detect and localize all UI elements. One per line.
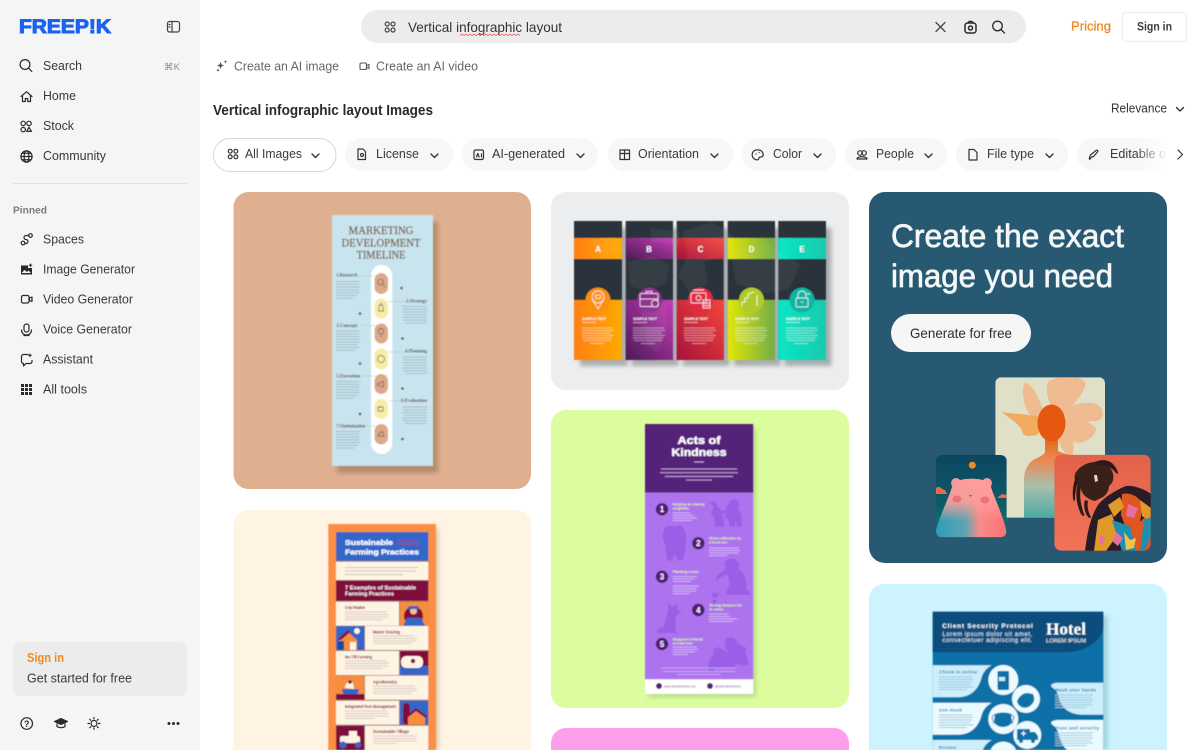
- poster: hotel protocol: [933, 612, 1103, 750]
- columns: [574, 221, 826, 360]
- row images: [336, 602, 428, 750]
- poster shadow: [337, 222, 438, 473]
- row headings: Agroforestry: [373, 680, 398, 684]
- silhouettes: [656, 499, 750, 671]
- nav: search: Search: [43, 58, 82, 73]
- poster title: MARKETING: [348, 225, 414, 237]
- poster: hotel protocol: LOREM IPSUM: [1046, 638, 1086, 644]
- chip: all images: [214, 138, 336, 172]
- poster title: [342, 225, 420, 262]
- chip: people: People: [876, 146, 914, 161]
- number badges: [656, 503, 704, 650]
- step headings: Gives affection to: [709, 536, 742, 540]
- phone icon: [998, 671, 1009, 690]
- row headings: Sustainable Tillage: [373, 729, 410, 734]
- poster title: Acts of: [678, 435, 721, 447]
- nav: video generator: Video Generator: [43, 292, 134, 306]
- number badges: 4: [696, 606, 701, 615]
- nav: home: Home: [43, 88, 76, 103]
- icon: scroll arrow: [1178, 150, 1182, 159]
- image: flower silhouette: [995, 377, 1105, 518]
- nav: spaces: [21, 232, 84, 246]
- spelling underline: [460, 34, 520, 36]
- icon: help: [21, 718, 32, 729]
- step headings: Planting a tree.: [673, 570, 700, 574]
- poster: sustainable farming: Farming Practices: [345, 592, 394, 598]
- row body lines: [345, 612, 417, 744]
- chip: license: License: [376, 146, 419, 161]
- row headings: Crop Rotation: [345, 605, 365, 610]
- column C: C: [698, 245, 704, 254]
- panel headings: Wash your hands: [1055, 688, 1096, 692]
- icon: camera: [965, 22, 976, 33]
- column D: [728, 221, 775, 360]
- poster footer: [656, 683, 741, 689]
- poster: sustainable farming: Farming Practices: [345, 548, 419, 556]
- fade mask over chip row: [1135, 136, 1168, 173]
- panel headings: Check in online: [939, 670, 977, 674]
- promo headline: image you need: [891, 258, 1113, 294]
- poster title: Kindness: [672, 447, 726, 459]
- chip: file type: [956, 138, 1068, 171]
- panel: card acts of kindness: [551, 410, 849, 708]
- panel headings: Use mask: [939, 708, 962, 712]
- panel headings: [939, 670, 1099, 750]
- chip: color: [742, 138, 836, 171]
- column D: SAMPLE TEXT: [735, 317, 760, 321]
- panel: sign in card: Sign in: [27, 650, 64, 665]
- column A: SAMPLE TEXT: [582, 317, 607, 321]
- chip: orientation: Orientation: [638, 146, 699, 161]
- column E: [778, 221, 826, 360]
- row headings: No-Till Farming: [345, 654, 372, 660]
- panel headings: Trust and security: [1055, 726, 1099, 730]
- chip: people: [845, 138, 947, 171]
- icon: more: [168, 722, 180, 725]
- nav: assistant: [22, 352, 93, 366]
- panel: promo create image: [869, 192, 1167, 563]
- step headings: [673, 502, 743, 646]
- step labels: 7.Optimization: [336, 424, 366, 429]
- panel: card hotel protocol: [869, 584, 1167, 750]
- connector lines: [358, 276, 407, 426]
- image: portrait: [1054, 455, 1151, 551]
- nav: spaces: Spaces: [43, 232, 84, 246]
- divider: [13, 183, 187, 184]
- column E: E: [799, 245, 805, 254]
- row headings: [345, 605, 410, 734]
- link: pricing: Pricing: [1071, 18, 1111, 34]
- column A: [574, 221, 622, 360]
- search query text: Vertical infographic layout: [408, 19, 562, 35]
- nav: community: Community: [43, 148, 106, 163]
- poster footer: @actsofkindness: [715, 684, 741, 688]
- icon: search: [993, 21, 1004, 33]
- search bar: [361, 10, 1026, 43]
- ambulance icon: [1017, 729, 1038, 743]
- panel: sign in card: Get started for free: [27, 670, 132, 686]
- link: create an AI video: Create an AI video: [376, 58, 478, 74]
- step body lines: [673, 513, 740, 654]
- sort dropdown: relevance: Relevance: [1111, 100, 1167, 116]
- icon: theme: [88, 718, 100, 729]
- mask icon: [992, 712, 1014, 727]
- column C: [677, 221, 724, 360]
- panel: card five-column banners: [551, 192, 849, 390]
- number badges: 1: [660, 505, 665, 514]
- button: generate for free: [891, 314, 1031, 352]
- panel: card marketing timeline: [234, 192, 531, 489]
- chip: file type: File type: [987, 146, 1034, 161]
- nav: search: [20, 58, 181, 73]
- wavy accent: [398, 540, 418, 545]
- poster intro lines: [660, 469, 738, 480]
- column B: [626, 221, 673, 360]
- subheader: [336, 581, 428, 601]
- image: bear: [936, 455, 1007, 537]
- icon: clear: [936, 22, 945, 32]
- body text lines: [582, 322, 800, 324]
- row headings: Integrated Pest Management: [345, 704, 397, 709]
- panel headings: Rooms: [939, 745, 956, 750]
- step headings: Support a friend: [673, 638, 703, 642]
- filter chips row: [214, 136, 1200, 173]
- chip: AI-generated: AI-generated: [492, 146, 565, 161]
- step headings: a loved one.: [709, 540, 728, 544]
- info panels: [933, 665, 992, 697]
- poster closing text: [662, 668, 736, 674]
- panel: card partially visible pink: [551, 728, 849, 750]
- chip: color: Color: [773, 146, 803, 161]
- panel: sign in card: [13, 642, 187, 696]
- icon: academy: [54, 718, 68, 728]
- column B: B: [646, 245, 652, 254]
- step labels: [336, 274, 428, 429]
- button: sign in: Sign in: [1137, 22, 1172, 34]
- step labels: 3.Concept: [336, 324, 358, 329]
- world map overlay: [590, 222, 800, 352]
- step labels: 1.Research: [336, 274, 358, 279]
- nav: stock: [21, 118, 74, 133]
- poster shadow: [331, 528, 439, 750]
- step headings: Helping an elderly: [673, 502, 706, 506]
- nav: search: ⌘ K: [164, 62, 181, 73]
- timeline icons: [378, 279, 385, 436]
- row text boxes: [336, 602, 428, 750]
- hand washing icon: [1017, 693, 1034, 708]
- chip: orientation: [608, 138, 733, 171]
- button: generate for free: Generate for free: [910, 325, 1012, 341]
- nav: stock: Stock: [43, 118, 74, 133]
- nav: home: [21, 88, 76, 103]
- poster: sustainable farming: 7 Examples of Sustainable: [345, 586, 416, 592]
- poster title: TIMELINE: [356, 250, 406, 262]
- chip: all images: All Images: [245, 146, 302, 161]
- nav: voice generator: Voice Generator: [43, 322, 133, 336]
- step headings: Giving flowers for: [709, 604, 743, 608]
- button: sign in: [1122, 12, 1186, 42]
- panel: left sidebar: [0, 0, 200, 750]
- nav: assistant: Assistant: [43, 352, 93, 366]
- row headings: Manor Grazing: [373, 630, 400, 634]
- poster title: [672, 435, 726, 459]
- chip: AI-generated: [462, 138, 598, 171]
- poster: hotel protocol: Client Security Protocol: [942, 623, 1033, 630]
- poster shadow: [648, 428, 756, 697]
- column B: SAMPLE TEXT: [633, 317, 658, 321]
- poster: acts of kindness: [645, 424, 753, 694]
- intro block: [336, 562, 428, 580]
- nav: all tools: [21, 382, 87, 396]
- poster footer: www.actsofkindness.com: [664, 684, 696, 688]
- chip: editable: [1077, 138, 1187, 171]
- icon: help: ?: [24, 719, 29, 729]
- step headings: neighbor.: [673, 506, 690, 510]
- column A: A: [595, 245, 601, 254]
- column C: SAMPLE TEXT: [684, 317, 709, 321]
- decorative sparkles: [359, 287, 404, 440]
- logo: FREEP!K: [19, 17, 111, 38]
- poster: hotel protocol: consectetuer adipiscing elit.: [942, 637, 1033, 644]
- poster header: [933, 612, 1103, 652]
- timeline pill: [371, 265, 392, 454]
- column D: D: [749, 245, 755, 254]
- step headings: in a bad time: [673, 642, 693, 646]
- nav: image generator: Image Generator: [43, 262, 136, 276]
- nav: all tools: All tools: [43, 382, 87, 396]
- poster: sustainable farming: [328, 524, 436, 750]
- step headings: no reason.: [709, 608, 724, 612]
- poster shadow: [937, 616, 1108, 750]
- step labels: 5.Execution: [336, 374, 361, 379]
- step body text: [336, 282, 427, 448]
- promo headline: Create the exact: [891, 218, 1124, 254]
- number badges: 2: [696, 539, 701, 548]
- icon circles: [988, 665, 1041, 750]
- panel: card sustainable farming: [234, 510, 531, 750]
- timeline stops: [374, 273, 388, 444]
- poster header: [336, 532, 428, 561]
- chip: editable: Editable o: [1110, 146, 1166, 161]
- chip: license: [345, 138, 453, 171]
- promo headline: [891, 218, 1124, 294]
- step labels: 2.Strategy: [406, 299, 428, 304]
- poster title: DEVELOPMENT: [342, 238, 420, 250]
- column shadows: [580, 228, 831, 366]
- column E: SAMPLE TEXT: [786, 317, 811, 321]
- poster: hotel protocol: Lorem ipsum dolor sit amet,: [942, 631, 1033, 638]
- heading: results title: Vertical infographic layout Images: [213, 102, 433, 119]
- number badges: 5: [660, 640, 665, 649]
- heading: pinned: Pinned: [13, 204, 47, 216]
- icon: collapse sidebar: [168, 22, 180, 32]
- poster: hotel protocol: Hotel: [1046, 620, 1086, 638]
- link: create an AI image: Create an AI image: [234, 58, 339, 74]
- icon: search type: [385, 22, 395, 32]
- poster: marketing timeline: [332, 215, 433, 466]
- number badges: 3: [660, 573, 665, 582]
- panel body lines: [939, 677, 1093, 746]
- step labels: 6.Evaluation: [401, 399, 427, 404]
- poster: sustainable farming: Sustainable: [345, 538, 393, 547]
- step labels: 4.Planning: [405, 349, 428, 354]
